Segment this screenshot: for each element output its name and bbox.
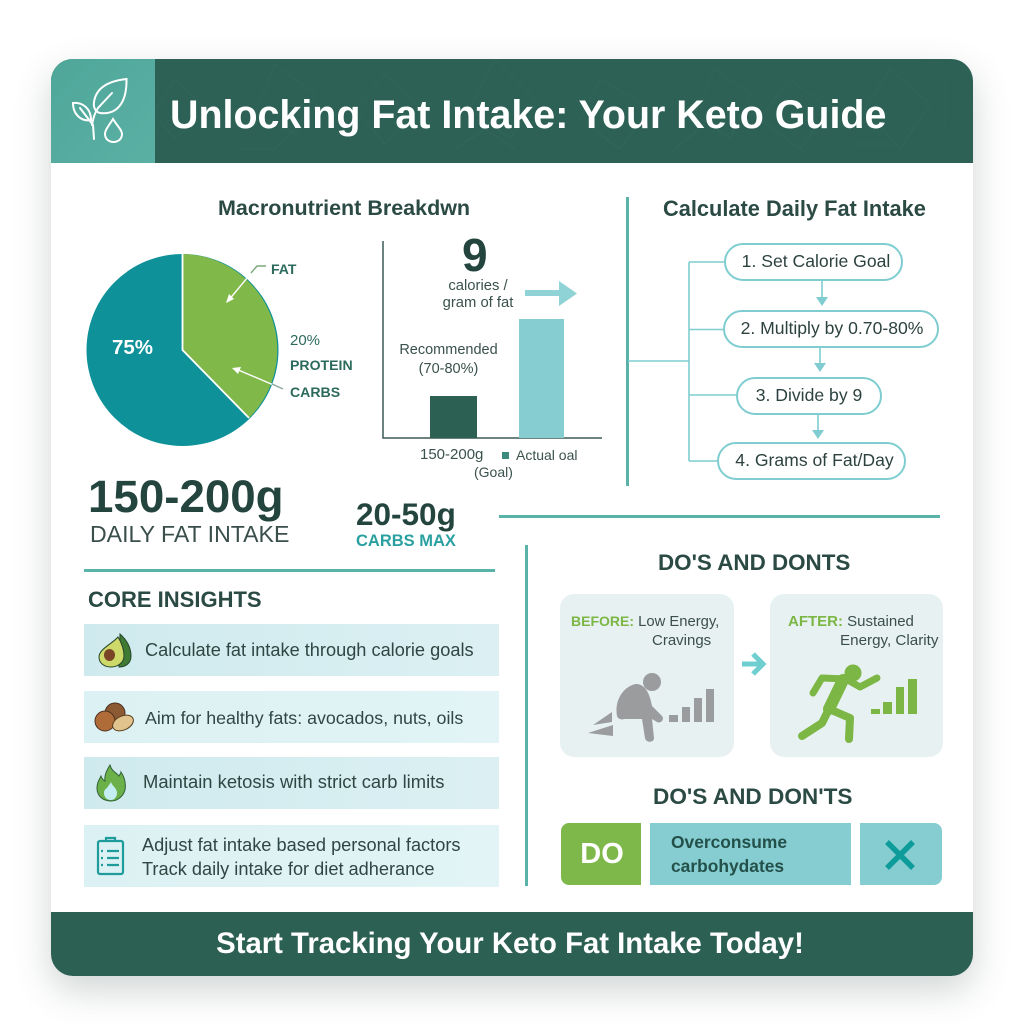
- text: 20%: [290, 332, 320, 349]
- stat: carbs max: CARBS MAX: [356, 532, 456, 550]
- bar note: calories /: [448, 278, 508, 294]
- stat: carbs max: 20-50g: [356, 496, 456, 532]
- legend: Actual oal: [516, 447, 577, 463]
- panel: before: Cravings: [652, 632, 711, 649]
- pie chart: [86, 254, 284, 446]
- heading: do's and donts: DO'S AND DONTS: [658, 550, 850, 575]
- insight row 2: Aim for healthy fats: avocados, nuts, oils: [145, 708, 463, 728]
- goal label: (Goal): [474, 464, 513, 480]
- step 4: [717, 442, 906, 480]
- header pattern: [155, 59, 973, 163]
- icon: tired person: [588, 673, 714, 742]
- panel: before: [560, 594, 734, 757]
- icon: nuts: [94, 702, 134, 732]
- footer band: [51, 912, 973, 976]
- flow diagram: [628, 243, 939, 480]
- step 3: [736, 377, 882, 415]
- stat: carbs max: [356, 496, 456, 550]
- step 2: 2. Multiply by 0.70-80%: [741, 318, 923, 338]
- insight row 3: Maintain ketosis with strict carb limits: [143, 771, 444, 792]
- panel: after: [770, 594, 943, 757]
- do text: Overconsume: [671, 832, 787, 852]
- header band: [51, 59, 973, 163]
- recommended label: [399, 342, 498, 377]
- do text: [650, 823, 851, 885]
- insight row 1: Calculate fat intake through calorie goals: [145, 640, 474, 660]
- insight row 4: Track daily intake for diet adherance: [142, 859, 435, 879]
- step 4: 4. Grams of Fat/Day: [735, 450, 894, 470]
- do badge: [561, 823, 641, 885]
- step 3: 3. Divide by 9: [756, 385, 862, 405]
- section divider vertical: [626, 197, 628, 486]
- step 2: [723, 310, 939, 348]
- insight row 1: [84, 624, 499, 676]
- do badge: DO: [580, 838, 624, 870]
- bar chart: [382, 241, 602, 439]
- icon: leaf and water drop: [72, 78, 128, 143]
- icon: avocado: [98, 633, 132, 668]
- heading: calculate: Calculate Daily Fat Intake: [663, 196, 926, 221]
- insight row 2: [84, 691, 499, 743]
- insight row 4: [84, 825, 499, 887]
- footer text: Start Tracking Your Keto Fat Intake Today!: [216, 927, 804, 960]
- step 1: [724, 243, 903, 281]
- pie labels: FAT: [271, 261, 296, 277]
- big number nine: 9: [462, 229, 488, 281]
- dividers: [499, 515, 940, 518]
- icon: running person: [798, 664, 917, 743]
- heading: do's and don'ts: DO'S AND DON'TS: [653, 784, 852, 809]
- insight row 4: Adjust fat intake based personal factors: [142, 835, 460, 855]
- pie chart: 75%: [112, 336, 153, 359]
- stat: daily fat intake: [88, 471, 289, 547]
- text: PROTEIN: [290, 357, 353, 373]
- icon: clipboard: [96, 836, 124, 876]
- recommended label: (70-80%): [419, 361, 478, 377]
- arrow: before to after: [742, 652, 766, 676]
- bar note: gram of fat: [443, 295, 513, 311]
- bar note: [443, 278, 514, 311]
- heading: core insights: CORE INSIGHTS: [88, 587, 262, 612]
- header icon block: [51, 59, 155, 163]
- insight row 3: [84, 757, 499, 809]
- cross badge: [860, 823, 942, 885]
- title: Unlocking Fat Intake: Your Keto Guide: [170, 93, 886, 137]
- panel: after: Energy, Clarity: [840, 632, 938, 649]
- stat: daily fat intake: DAILY FAT INTAKE: [90, 521, 289, 547]
- step 1: 1. Set Calorie Goal: [742, 251, 890, 271]
- icon: flame: [96, 764, 126, 802]
- stat: daily fat intake: 150-200g: [88, 471, 284, 522]
- recommended label: Recommended: [399, 342, 498, 358]
- bar axis labels: 150-200g: [420, 446, 483, 463]
- heading: macronutrient breakdown: Macronutrient Breakdwn: [218, 196, 470, 220]
- before text: BEFORE: Low Energy,: [571, 613, 719, 630]
- after text: AFTER: Sustained: [788, 613, 914, 630]
- icon: cross: [885, 840, 915, 870]
- do text: carbohydates: [671, 856, 784, 876]
- text: CARBS: [290, 384, 340, 400]
